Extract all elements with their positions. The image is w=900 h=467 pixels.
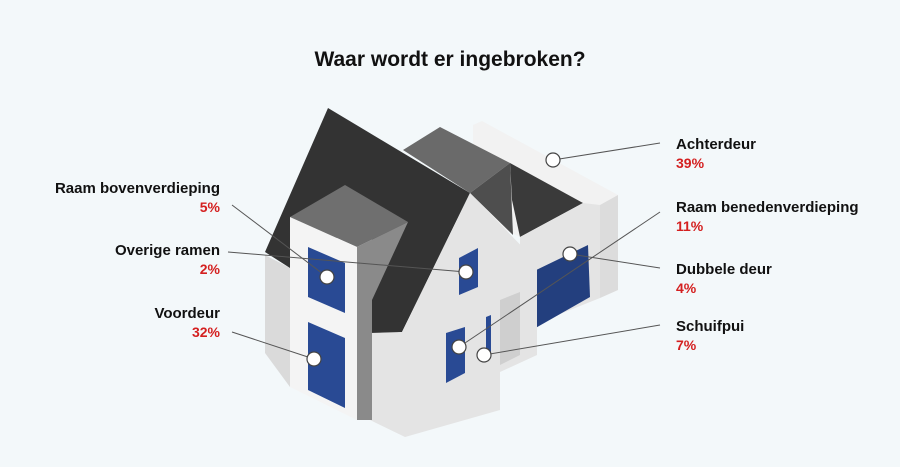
label: Schuifpui (676, 318, 744, 353)
connector lines (228, 143, 660, 359)
label: Voordeur: 32% (192, 324, 220, 340)
label: Overige ramen (115, 242, 220, 277)
label: Overige ramen: Overige ramen (115, 242, 220, 259)
markers (307, 153, 577, 366)
label: Raam benedenverdieping: 11% (676, 218, 703, 234)
label: Achterdeur: 39% (676, 155, 704, 171)
label: Schuifpui: 7% (676, 337, 696, 353)
label: Raam benedenverdieping: Raam benedenverdieping (676, 199, 859, 216)
label: Dubbele deur (676, 261, 772, 296)
label: Voordeur: Voordeur (154, 305, 220, 322)
label: Raam bovenverdieping: 5% (200, 199, 220, 215)
label: Raam bovenverdieping: Raam bovenverdieping (55, 180, 220, 197)
main roof (265, 108, 470, 335)
label: Raam bovenverdieping (55, 180, 220, 215)
left wing wall (265, 255, 290, 387)
tower (290, 185, 408, 420)
windows (308, 247, 491, 408)
gable wall (370, 193, 537, 437)
label: Dubbele deur: 4% (676, 280, 696, 296)
label: Achterdeur (676, 136, 756, 171)
label: Dubbele deur: Dubbele deur (676, 261, 772, 278)
label: Raam benedenverdieping (676, 199, 859, 234)
back roof block (403, 127, 513, 235)
label: Achterdeur: Achterdeur (676, 136, 756, 153)
title: Waar wordt er ingebroken? (314, 48, 586, 71)
label: Schuifpui: Schuifpui (676, 318, 744, 335)
label: Voordeur (154, 305, 220, 340)
garage (473, 121, 618, 330)
label: Overige ramen: 2% (200, 261, 220, 277)
